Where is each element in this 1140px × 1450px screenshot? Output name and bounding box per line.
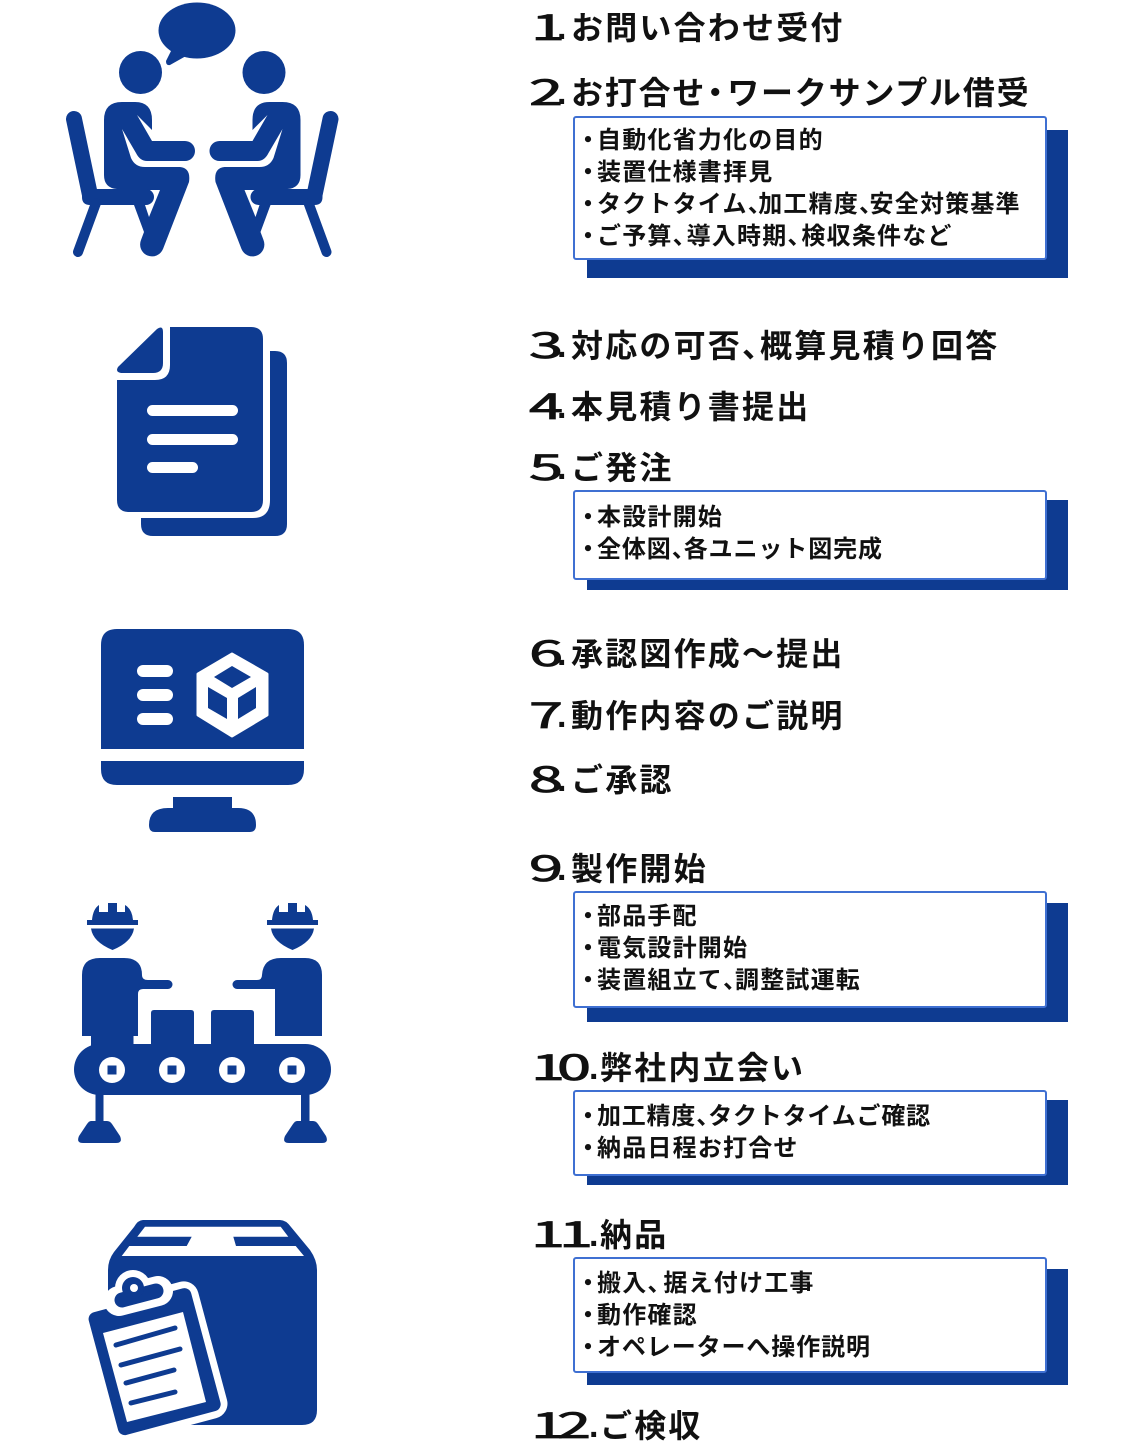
heading: step 2: . bbox=[557, 74, 566, 112]
text: step 9 line 1: ・ bbox=[576, 903, 600, 930]
text: step 11 line 2: ・ bbox=[576, 1302, 600, 1329]
text: step 10 line 1: ・ bbox=[576, 1103, 600, 1130]
text: step 10 line 2: 納品日程お打合せ bbox=[597, 1135, 799, 1162]
heading: step 11: . bbox=[589, 1216, 598, 1254]
text: step 9 line 2: 電気設計開始 bbox=[597, 935, 748, 962]
heading: step 11 bbox=[531, 1207, 668, 1258]
text: step 2 line 3: 、 bbox=[859, 191, 883, 218]
heading: step 7 bbox=[529, 688, 845, 739]
text: step 2 line 4: 、 bbox=[673, 223, 697, 250]
heading: step 12: 1 bbox=[531, 1398, 565, 1449]
heading: step 6: . bbox=[557, 635, 566, 673]
heading: step 6: 承認図作成～提出 bbox=[571, 636, 845, 672]
text: step 5 line 2: ・ bbox=[576, 536, 600, 563]
text: step 2 line 2: 装置仕様書拝見 bbox=[597, 159, 773, 186]
text: step 9 line 3: ・ bbox=[576, 967, 600, 994]
heading: step 10: 弊社内立会い bbox=[600, 1050, 805, 1086]
text: step 10 line 1: 加工精度 タクトタイムご確認 bbox=[597, 1103, 931, 1130]
text: step 2 line 1: 自動化省力化の目的 bbox=[597, 127, 824, 154]
heading: step 4: 4 bbox=[529, 379, 563, 430]
text: step 5 line 1: 本設計開始 bbox=[597, 504, 723, 531]
text: step 9 line 2: ・ bbox=[576, 935, 600, 962]
heading: step 12: ご検収 bbox=[600, 1408, 703, 1444]
text: step 9 line 3: 、 bbox=[723, 967, 747, 994]
text: step 10 line 1: 、 bbox=[696, 1103, 720, 1130]
heading: step 6: 6 bbox=[529, 626, 563, 677]
text: step 11 line 2: 動作確認 bbox=[597, 1302, 698, 1329]
heading: step 4: 本見積り書提出 bbox=[571, 389, 810, 425]
shadow: step 10 box bbox=[587, 1100, 1068, 1185]
text: step 5 line 1: ・ bbox=[576, 504, 600, 531]
text: step 2 line 2: ・ bbox=[576, 159, 600, 186]
panel: step 10 details bbox=[573, 1090, 1047, 1176]
panel: step 2 details bbox=[573, 116, 1047, 260]
heading: step 2: ・ bbox=[699, 75, 731, 111]
text: step 2 line 1: ・ bbox=[576, 127, 600, 154]
heading: step 8 bbox=[529, 752, 674, 803]
heading: step 1: . bbox=[557, 9, 566, 47]
text: step 11 line 1: 搬入 据え付け工事 bbox=[597, 1270, 815, 1297]
heading: step 8: ご承認 bbox=[571, 762, 674, 798]
text: step 2 line 4: 、 bbox=[787, 223, 811, 250]
heading: step 1: お問い合わせ受付 bbox=[571, 10, 845, 46]
heading: step 6 bbox=[529, 626, 845, 677]
text: step 11 line 1: ・ bbox=[576, 1270, 600, 1297]
heading: step 4 bbox=[529, 379, 810, 430]
text: step 2 line 3: 、 bbox=[748, 191, 772, 218]
heading: step 3: 、 bbox=[742, 328, 774, 364]
text: step 11 line 1: 、 bbox=[647, 1270, 671, 1297]
heading: step 5: 5 bbox=[529, 440, 563, 491]
heading: step 1: 1 bbox=[531, 0, 565, 51]
heading: step 7: . bbox=[557, 697, 566, 735]
heading: step 5 bbox=[529, 440, 674, 491]
text: step 11 line 3: ・ bbox=[576, 1334, 600, 1361]
heading: step 11: 1 bbox=[531, 1207, 565, 1258]
heading: step 10 bbox=[531, 1040, 805, 1091]
heading: step 9: 製作開始 bbox=[571, 851, 708, 887]
text: step 9 line 3: 装置組立て 調整試運転 bbox=[597, 967, 861, 994]
shadow: step 11 box bbox=[587, 1269, 1068, 1385]
heading: step 9: 9 bbox=[529, 841, 563, 892]
heading: step 2: お打合せ ワークサンプル借受 bbox=[571, 75, 1030, 111]
heading: step 11: 納品 bbox=[600, 1217, 668, 1253]
heading: step 10: 0 bbox=[557, 1040, 591, 1091]
text: step 5 line 2: 、 bbox=[672, 536, 696, 563]
heading: step 2: 2 bbox=[529, 65, 563, 116]
heading: step 8: 8 bbox=[529, 752, 563, 803]
heading: step 7: 動作内容のご説明 bbox=[571, 698, 845, 734]
heading: step 10: 1 bbox=[531, 1040, 565, 1091]
text: step 2 line 3: ・ bbox=[576, 191, 600, 218]
heading: step 7: 7 bbox=[529, 688, 563, 739]
heading: step 9 bbox=[529, 841, 708, 892]
heading: step 12: . bbox=[589, 1407, 598, 1445]
heading: step 3 bbox=[529, 318, 999, 369]
heading: step 12: 2 bbox=[557, 1398, 591, 1449]
heading: step 3: 3 bbox=[529, 318, 563, 369]
panel: step 5 details bbox=[573, 490, 1047, 580]
text: step 2 line 3: タクトタイム 加工精度 安全対策基準 bbox=[597, 191, 1021, 218]
heading: step 5: ご発注 bbox=[571, 450, 674, 486]
heading: step 12 bbox=[531, 1398, 703, 1449]
panel: step 11 details bbox=[573, 1257, 1047, 1373]
text: step 2 line 4: ・ bbox=[576, 223, 600, 250]
panel: step 9 details bbox=[573, 891, 1047, 1008]
text: step 11 line 3: オペレーターへ操作説明 bbox=[597, 1334, 871, 1361]
heading: step 5: . bbox=[557, 449, 566, 487]
heading: step 9: . bbox=[557, 850, 566, 888]
heading: step 2 bbox=[529, 65, 1030, 116]
shadow: step 5 box bbox=[587, 500, 1068, 590]
heading: step 11: 1 bbox=[559, 1207, 593, 1258]
heading: step 4: . bbox=[557, 388, 566, 426]
heading: step 1 bbox=[531, 0, 845, 51]
heading: step 3: 対応の可否 概算見積り回答 bbox=[571, 328, 999, 364]
heading: step 10: . bbox=[589, 1049, 598, 1087]
text: step 5 line 2: 全体図 各ユニット図完成 bbox=[597, 536, 883, 563]
shadow: step 9 box bbox=[587, 903, 1068, 1022]
heading: step 8: . bbox=[557, 761, 566, 799]
text: step 2 line 4: ご予算 導入時期 検収条件など bbox=[597, 223, 953, 250]
text: step 9 line 1: 部品手配 bbox=[597, 903, 698, 930]
shadow: step 2 box bbox=[587, 130, 1068, 278]
text: step 10 line 2: ・ bbox=[576, 1135, 600, 1162]
heading: step 3: . bbox=[557, 327, 566, 365]
